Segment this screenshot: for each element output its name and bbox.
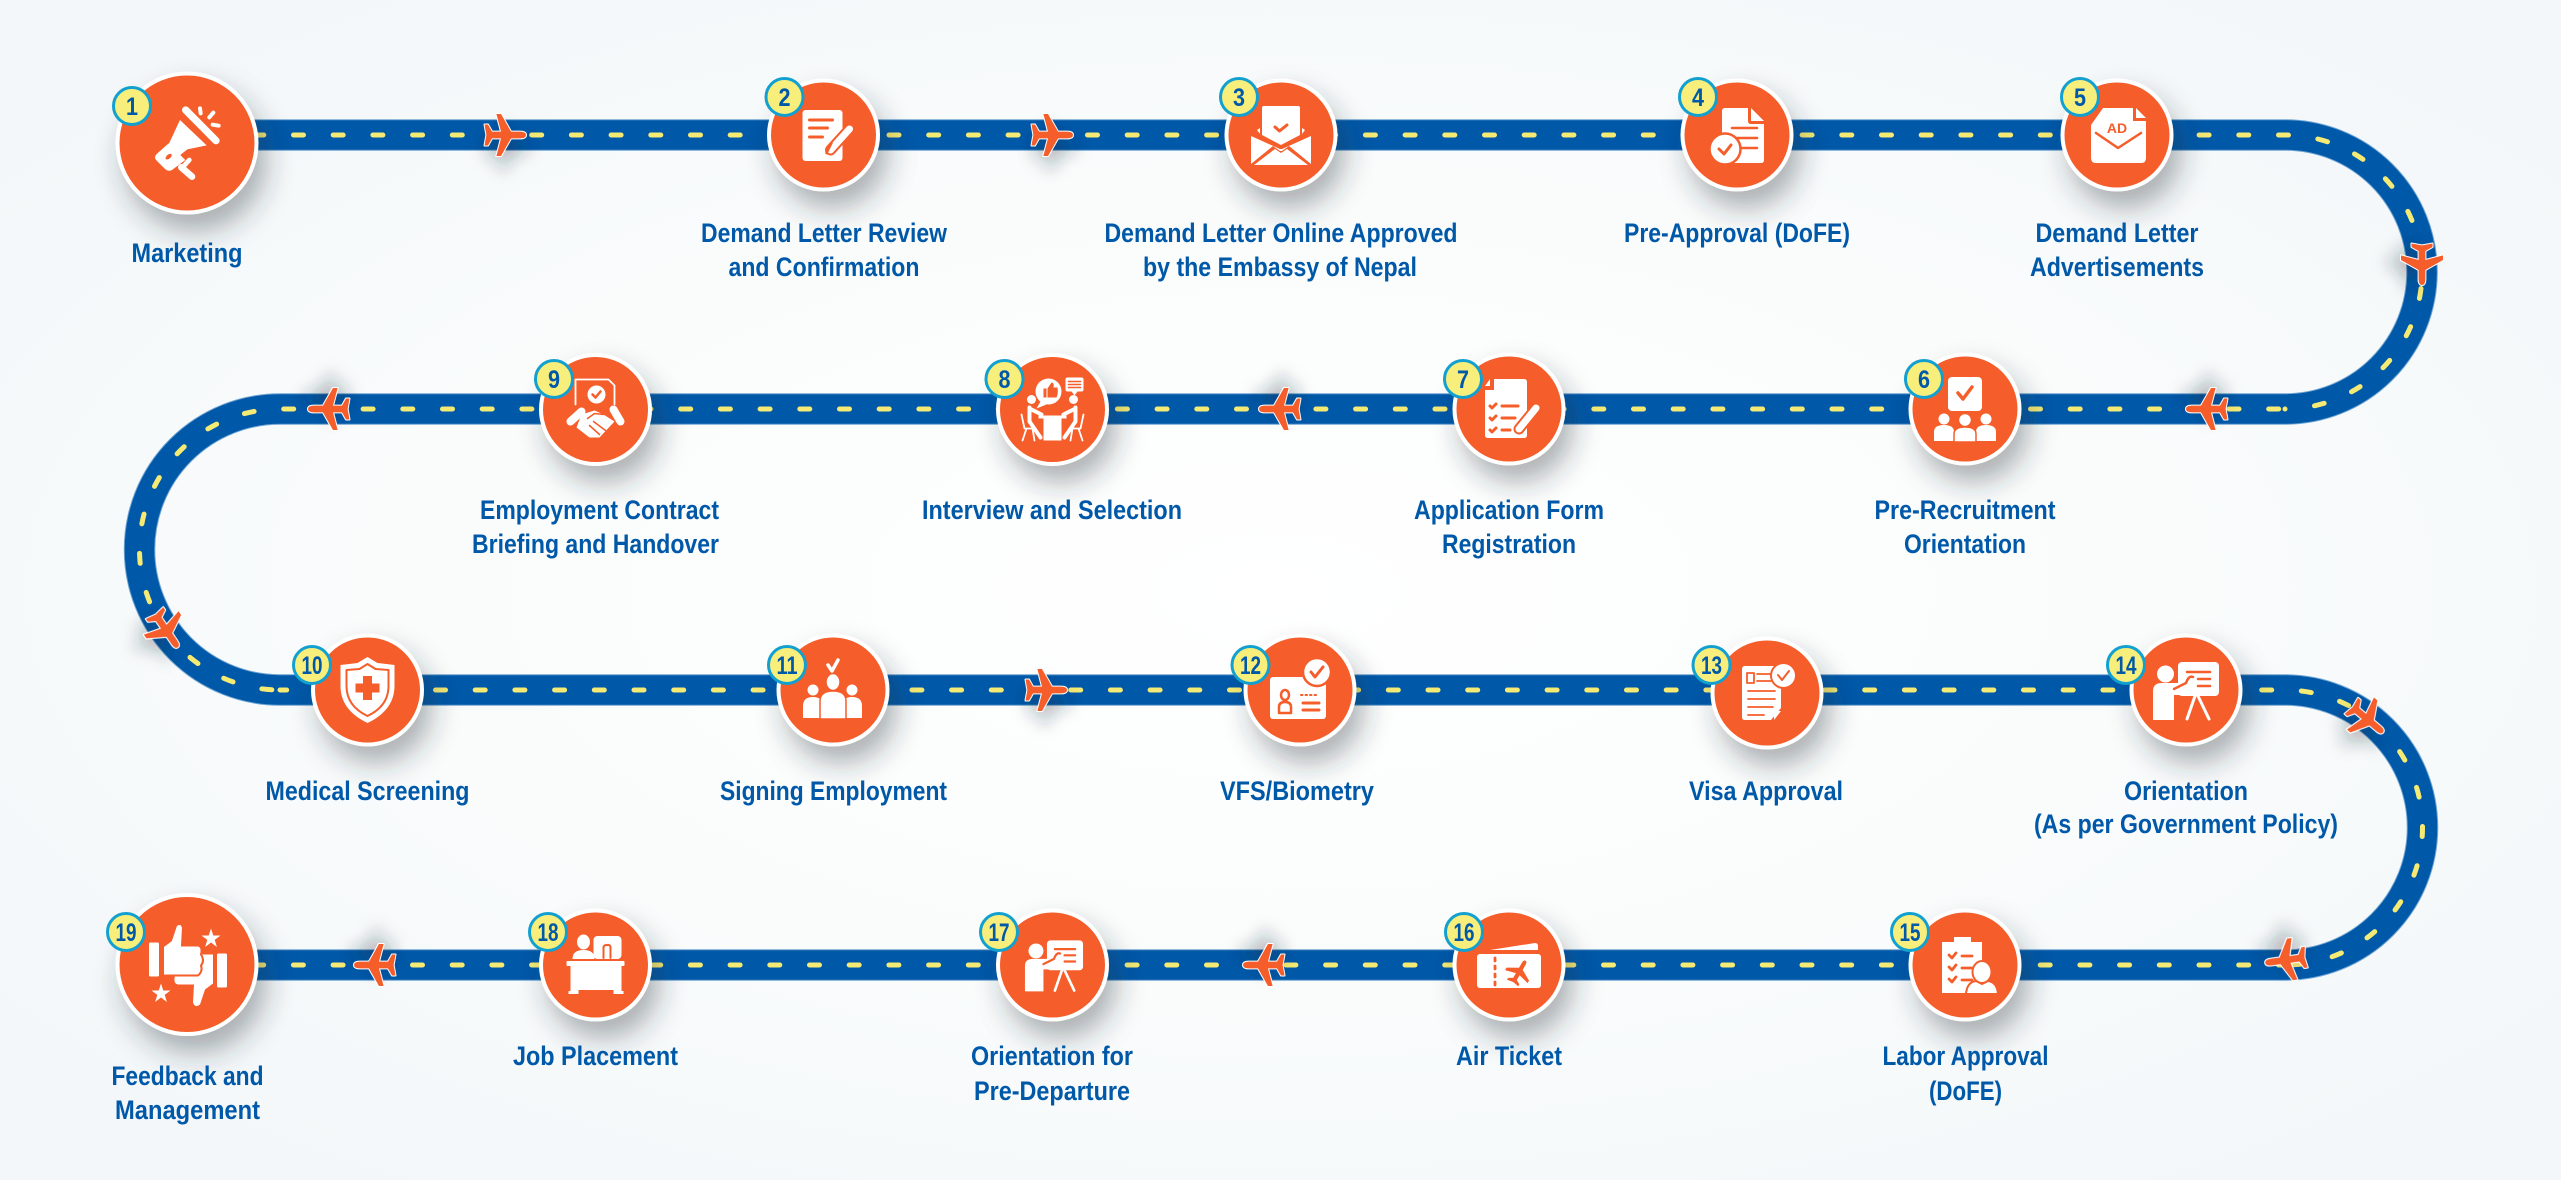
badge 1: 1 bbox=[126, 93, 138, 121]
badge 19: 19 bbox=[116, 919, 136, 947]
step 2: Demand Letter Review bbox=[701, 78, 947, 282]
badge 9: 9 bbox=[548, 366, 560, 394]
step 19: Feedback and Management bbox=[108, 895, 264, 1125]
label: Pre-Approval (DoFE) bbox=[1624, 218, 1850, 248]
icon: megaphone bbox=[155, 108, 219, 177]
plane 3 bbox=[2401, 244, 2443, 285]
label: Feedback and bbox=[112, 1061, 264, 1091]
step 15: Labor Approval bbox=[1882, 910, 2048, 1106]
step 16: Air Ticket bbox=[1446, 910, 1564, 1071]
badge 8 bbox=[986, 360, 1023, 398]
badge 18 bbox=[530, 914, 566, 950]
icon: presenter at board bbox=[1025, 940, 1083, 991]
label: Labor Approval bbox=[1882, 1041, 2048, 1071]
step 13: Visa Approval bbox=[1689, 638, 1843, 806]
label bbox=[2030, 218, 2204, 282]
badge 17 bbox=[980, 914, 1018, 950]
road path bbox=[139, 135, 2422, 965]
badge 19 bbox=[108, 914, 144, 950]
step 5: Demand Letter Advertisements bbox=[2030, 78, 2204, 282]
plane 2 bbox=[1032, 114, 1073, 156]
label: Signing Employment bbox=[720, 776, 947, 806]
icon: form with pen bbox=[1485, 379, 1536, 438]
label: Application Form bbox=[1414, 495, 1604, 525]
badge 15: 15 bbox=[1900, 919, 1921, 947]
label: (DoFE) bbox=[1929, 1076, 2002, 1106]
label: Advertisements bbox=[2030, 252, 2204, 282]
label: Pre-Departure bbox=[974, 1076, 1130, 1106]
badge 18: 18 bbox=[538, 919, 559, 947]
badge 7: 7 bbox=[1457, 366, 1469, 394]
plane 8 bbox=[1026, 669, 1067, 711]
label: Medical Screening bbox=[266, 776, 470, 806]
plane 6 bbox=[308, 388, 350, 430]
icon: interview table bbox=[1022, 378, 1084, 440]
step 17: Orientation for Pre-Departure bbox=[971, 910, 1133, 1106]
badge 9 bbox=[536, 360, 572, 398]
label: Pre-Recruitment bbox=[1874, 495, 2056, 525]
label: Marketing bbox=[132, 238, 242, 268]
icon: open envelope with check bbox=[1251, 106, 1311, 165]
icon: clipboard and person bbox=[1942, 937, 1998, 994]
label: Management bbox=[115, 1095, 260, 1125]
label bbox=[2034, 776, 2338, 839]
step 4: Pre-Approval bbox=[1624, 78, 1850, 248]
icon: ID card with check bbox=[1270, 658, 1331, 719]
icon: air ticket bbox=[1477, 943, 1541, 990]
step 14: Orientation (As per Government Policy) bbox=[2034, 636, 2338, 839]
label bbox=[1104, 218, 1458, 282]
badge 2: 2 bbox=[778, 84, 790, 112]
plane 5 bbox=[1259, 388, 1300, 430]
label: (As per Government Policy) bbox=[2034, 809, 2338, 839]
badge 7 bbox=[1444, 360, 1482, 398]
badge 5: 5 bbox=[2074, 84, 2086, 112]
badge 1 bbox=[114, 88, 150, 124]
label: Interview and Selection bbox=[922, 495, 1182, 525]
icon: presenter at board bbox=[2153, 662, 2219, 720]
step 7: Application Form Registration bbox=[1414, 354, 1604, 559]
label: VFS/Biometry bbox=[1220, 776, 1374, 806]
icon: document with pen bbox=[802, 110, 850, 161]
label: Briefing and Handover bbox=[472, 529, 719, 559]
icon: thumbs up and down bbox=[149, 924, 227, 1006]
step 12: VFS/Biometry bbox=[1220, 636, 1374, 806]
plane 11 bbox=[1243, 944, 1284, 986]
label: Demand Letter Review bbox=[701, 218, 947, 248]
step 10: Medical Screening bbox=[266, 636, 470, 806]
badge 13: 13 bbox=[1701, 652, 1722, 680]
icon: shield with cross bbox=[340, 657, 394, 723]
badge 6: 6 bbox=[1918, 366, 1930, 394]
badge 11: 11 bbox=[776, 652, 798, 680]
badge 5 bbox=[2062, 78, 2098, 116]
label: Demand Letter bbox=[2036, 218, 2198, 248]
label bbox=[1882, 1041, 2048, 1106]
badge 12 bbox=[1232, 646, 1269, 684]
badge 11 bbox=[768, 646, 806, 684]
plane 10 bbox=[2262, 936, 2309, 984]
label: Visa Approval bbox=[1689, 776, 1843, 806]
badge 4: 4 bbox=[1692, 84, 1704, 112]
label: Employment Contract bbox=[480, 495, 719, 525]
label: Orientation for bbox=[971, 1041, 1133, 1071]
badge 10 bbox=[294, 646, 330, 684]
step 11: Signing Employment bbox=[720, 636, 947, 806]
icon: ad envelope bbox=[2091, 108, 2146, 163]
badge 6 bbox=[1906, 360, 1942, 398]
step 3: Demand Letter Online Approved bbox=[1104, 78, 1458, 282]
badge 3: 3 bbox=[1233, 84, 1245, 112]
label bbox=[1874, 495, 2056, 559]
icon: document with check seal bbox=[1710, 108, 1764, 164]
icon: visa document with check bbox=[1742, 663, 1796, 720]
label bbox=[112, 1061, 264, 1125]
icon: ad envelope: AD bbox=[2107, 120, 2127, 136]
icon: contract handshake bbox=[570, 380, 620, 438]
step 1: Marketing bbox=[114, 74, 256, 268]
plane 9 bbox=[2338, 690, 2397, 749]
icon: person at desk bbox=[566, 934, 624, 994]
planes along the road bbox=[137, 114, 2443, 986]
plane 4 bbox=[2186, 388, 2228, 430]
badge 8: 8 bbox=[998, 366, 1011, 394]
badge 15 bbox=[1892, 914, 1928, 950]
step 18: Job Placement bbox=[513, 910, 678, 1071]
label: Orientation bbox=[1904, 529, 2026, 559]
step 8: Interview and Selection bbox=[922, 355, 1182, 525]
badge 4 bbox=[1680, 78, 1716, 116]
badge 16 bbox=[1446, 914, 1482, 950]
icon: checklist board with group bbox=[1934, 377, 1996, 442]
badge 14: 14 bbox=[2116, 652, 2137, 680]
label: by the Embassy of Nepal bbox=[1143, 252, 1417, 282]
label: Orientation bbox=[2124, 776, 2248, 806]
plane 7 bbox=[137, 601, 195, 659]
label: Job Placement bbox=[513, 1041, 678, 1071]
label bbox=[701, 218, 947, 282]
plane 12 bbox=[354, 944, 396, 986]
label bbox=[1414, 495, 1604, 559]
badge 3 bbox=[1220, 78, 1258, 116]
label: and Confirmation bbox=[728, 252, 920, 282]
step 6: Pre-Recruitment Orientation bbox=[1874, 354, 2056, 559]
label: Air Ticket bbox=[1456, 1041, 1562, 1071]
label: Registration bbox=[1442, 529, 1576, 559]
badge 17: 17 bbox=[988, 919, 1010, 947]
step 9: Employment Contract Briefing bbox=[472, 355, 719, 559]
icon: team with check bbox=[803, 660, 862, 719]
badge 10: 10 bbox=[302, 652, 322, 680]
badge 16: 16 bbox=[1454, 919, 1474, 947]
label bbox=[971, 1041, 1133, 1106]
label: Demand Letter Online Approved bbox=[1104, 218, 1458, 248]
plane 1 bbox=[484, 114, 526, 156]
badge 14 bbox=[2108, 646, 2144, 684]
label bbox=[472, 495, 719, 559]
badge 12: 12 bbox=[1240, 652, 1261, 680]
badge 13 bbox=[1693, 646, 1730, 684]
badge 2 bbox=[766, 78, 803, 116]
